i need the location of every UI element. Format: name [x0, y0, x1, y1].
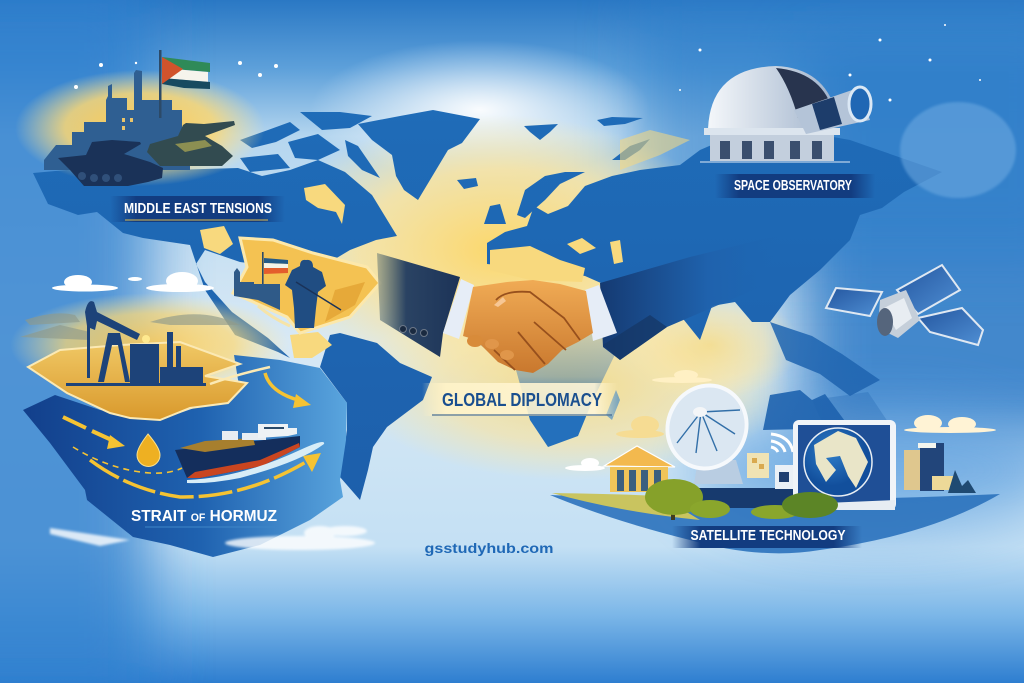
map: Eurasia [484, 124, 942, 446]
handshake [377, 235, 780, 373]
left sleeve [377, 253, 460, 357]
right sleeve [600, 235, 780, 360]
map: Africa southern tip [480, 290, 622, 447]
map: Greenland and Arctic islands [358, 110, 650, 200]
icon: clouds [52, 272, 214, 292]
icon: columned building [604, 446, 675, 492]
world map [33, 110, 942, 500]
label: Satellite Technology: SATELLITE TECHNOLOGY [690, 528, 846, 544]
website label: gsstudyhub.com [424, 540, 554, 556]
icon: planet [900, 102, 1016, 198]
golden land [28, 342, 247, 420]
label: Space Observatory [715, 174, 875, 198]
label: Space Observatory: SPACE OBSERVATORY [734, 178, 852, 194]
arrow: gold route at right [265, 373, 311, 408]
panel: satellite technology [550, 370, 1000, 553]
golden seas and lakes on map [200, 130, 690, 358]
arrow: route head right [303, 453, 321, 472]
icon: flag [159, 50, 210, 118]
label: Global Diplomacy [422, 383, 618, 416]
arrow: small dashed route [73, 447, 182, 473]
icon: small flag [262, 252, 288, 284]
icon: oil pumpjack and refinery [66, 301, 206, 386]
label: Global Diplomacy: GLOBAL DIPLOMACY [442, 390, 602, 410]
panel: Middle East tensions [15, 50, 285, 222]
label: Strait of Hormuz: STRAIT OF HORMUZ [131, 508, 277, 525]
map: Madagascar [606, 390, 620, 420]
panel: space observatory [679, 24, 1016, 198]
icon: monitor with globe [793, 420, 896, 510]
icon: low clouds [50, 526, 375, 550]
icon: tank rear [147, 121, 235, 166]
label: Middle East Tensions [110, 196, 285, 222]
icon: buildings [234, 268, 280, 310]
golden territory [15, 70, 265, 186]
icon: soldier [285, 260, 341, 328]
panel: Arabia map with soldier [233, 238, 380, 333]
icon: city skyline [44, 70, 190, 170]
icon: trees [645, 479, 838, 520]
label: Middle East Tensions: MIDDLE EAST TENSIONS [124, 201, 272, 217]
icon: clouds [565, 370, 996, 471]
icon: satellite [826, 265, 983, 345]
icon: stars [679, 24, 981, 102]
label: Satellite Technology [672, 526, 862, 548]
clasped hands [463, 280, 593, 373]
panel: oil field and Strait of Hormuz [10, 272, 375, 557]
sea [23, 355, 347, 557]
icon: telescope [794, 87, 871, 134]
left shirt cuff [443, 279, 474, 339]
right shirt cuff [585, 285, 617, 341]
map: North America [33, 112, 397, 358]
arrow: upper route [63, 417, 125, 449]
icon: equipment tower with wifi [690, 434, 795, 508]
icon: observatory dome [700, 66, 850, 162]
arrow: curved shipping route [90, 460, 306, 497]
landscape base [550, 494, 1000, 553]
icon: stars [74, 61, 278, 89]
icon: tank front [58, 140, 163, 186]
icon: office buildings [904, 443, 976, 493]
icon: satellite dish [654, 372, 760, 484]
map: South America [320, 333, 432, 500]
golden haze and hills [10, 293, 290, 397]
icon: oil drop [137, 434, 160, 467]
archipelago islands [240, 112, 380, 178]
icon: cargo ship [175, 424, 324, 483]
